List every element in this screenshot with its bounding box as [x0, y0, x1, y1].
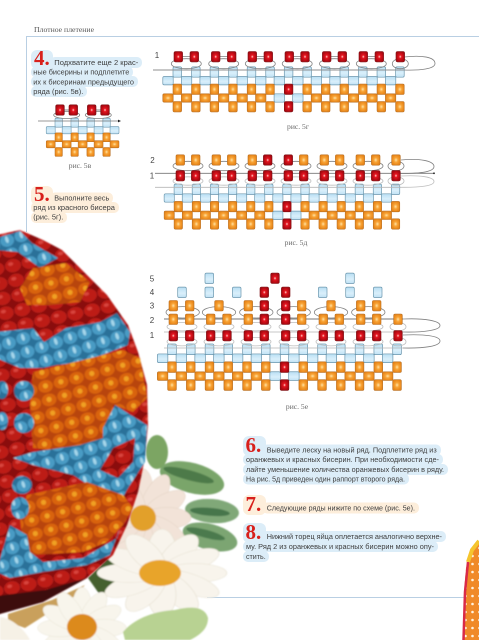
large daisy centre — [139, 560, 181, 586]
caption рис. 5в: рис. 5в — [69, 161, 92, 170]
row labels 5 to 1 (5е): 4 — [150, 288, 155, 297]
photo: flowers and leaves — [0, 435, 240, 640]
blue zigzag — [13, 405, 147, 502]
step 6 text block: оранжевых и красных бисерин. При необходимости сде- — [246, 455, 439, 464]
row labels 2 and 1 (5д): 2 — [150, 156, 155, 165]
photo: right edge beaded egg fragment — [463, 541, 479, 640]
top blue patch — [0, 231, 58, 268]
dark base of egg — [0, 578, 87, 615]
step 8 text block: стить. — [246, 552, 266, 561]
top orange patch — [20, 263, 90, 305]
figure 5д: bead diagram — [155, 155, 435, 229]
step 7 text block: 7. — [246, 492, 261, 516]
step 8 text block: 8. — [246, 520, 261, 544]
step 4 text block: ряда (рис. 5в). — [33, 87, 83, 96]
step 6 text block: 6. — [246, 433, 261, 457]
step 4 text block: 4. — [34, 46, 50, 70]
step 5 text block: (рис. 5г). — [33, 213, 63, 222]
bottom left petal — [0, 617, 30, 640]
tan table patch — [8, 585, 85, 628]
figure 5е: bead diagram — [157, 273, 440, 390]
row labels 5 to 1 (5е) — [150, 274, 155, 340]
blue band — [0, 313, 130, 368]
step 5 text block: 5. — [34, 182, 50, 206]
figure 5в: bead diagram — [38, 105, 121, 156]
caption рис. 5г: рис. 5г — [287, 122, 309, 131]
lower daisy centre — [67, 614, 97, 640]
step 4 text block: их к бисеринам предыдущего — [33, 78, 134, 86]
step 4 text block — [31, 46, 142, 97]
step 6 text block: Выведите леску на новый ряд. Подплетите ряд из — [267, 446, 437, 454]
upper daisy — [95, 469, 191, 567]
step 6 text block — [243, 433, 448, 484]
top leaf — [146, 435, 168, 469]
single blue beads left — [0, 381, 34, 519]
step 5 text block: Выполните весь — [54, 194, 109, 202]
step 7 text block — [243, 492, 419, 516]
step 5 text block: ряд из красного бисера — [33, 203, 116, 212]
figure 5г: bead diagram — [153, 52, 435, 112]
red diamond in zigzag — [100, 438, 135, 478]
dark leaves under egg — [88, 548, 130, 595]
lower right light leaf — [123, 608, 208, 640]
row labels 5 to 1 (5е): 5 — [150, 274, 155, 284]
row label 1 (5г): 1 — [155, 51, 160, 60]
photo: beaded egg — [0, 230, 148, 615]
step 8 text block: му. Ряд 2 из оранжевых и красных бисерин можно опу- — [246, 542, 434, 551]
step 7 text block: Следующие ряды нижите по схеме (рис. 5е). — [267, 504, 415, 512]
step 5 text block — [31, 182, 119, 223]
running header: Плотное плетение — [34, 25, 95, 34]
lower blue band — [0, 525, 120, 578]
lower daisy — [38, 587, 126, 640]
row labels 2 and 1 (5д): 1 — [150, 172, 155, 180]
step 6 text block: лайте уменьшение количества оранжевых бисерин в ряду. — [246, 465, 444, 474]
step 6 text block: На рис. 5д приведен один раппорт второго ряда. — [246, 474, 405, 484]
row labels 5 to 1 (5е): 2 — [150, 316, 155, 325]
lower orange panel — [20, 482, 133, 555]
step 4 text block: ные бисерины и подплетите — [33, 68, 129, 77]
second leaf — [156, 455, 228, 501]
caption рис. 5е: рис. 5е — [286, 402, 309, 411]
row labels 5 to 1 (5е): 3 — [150, 302, 155, 310]
caption рис. 5д: рис. 5д — [285, 238, 307, 247]
large orange panel — [30, 350, 147, 452]
step 8 text block — [243, 520, 446, 562]
fourth leaf — [180, 517, 240, 557]
large daisy — [97, 529, 227, 617]
step 8 text block: Нижний торец яйца оплетается аналогично верхне- — [267, 532, 442, 541]
upper daisy centre — [130, 505, 156, 531]
row labels 2 and 1 (5д) — [150, 156, 155, 180]
step 4 text block: Подхватите еще 2 крас- — [54, 58, 139, 67]
row labels 5 to 1 (5е): 1 — [150, 331, 155, 340]
third leaf — [184, 497, 240, 525]
